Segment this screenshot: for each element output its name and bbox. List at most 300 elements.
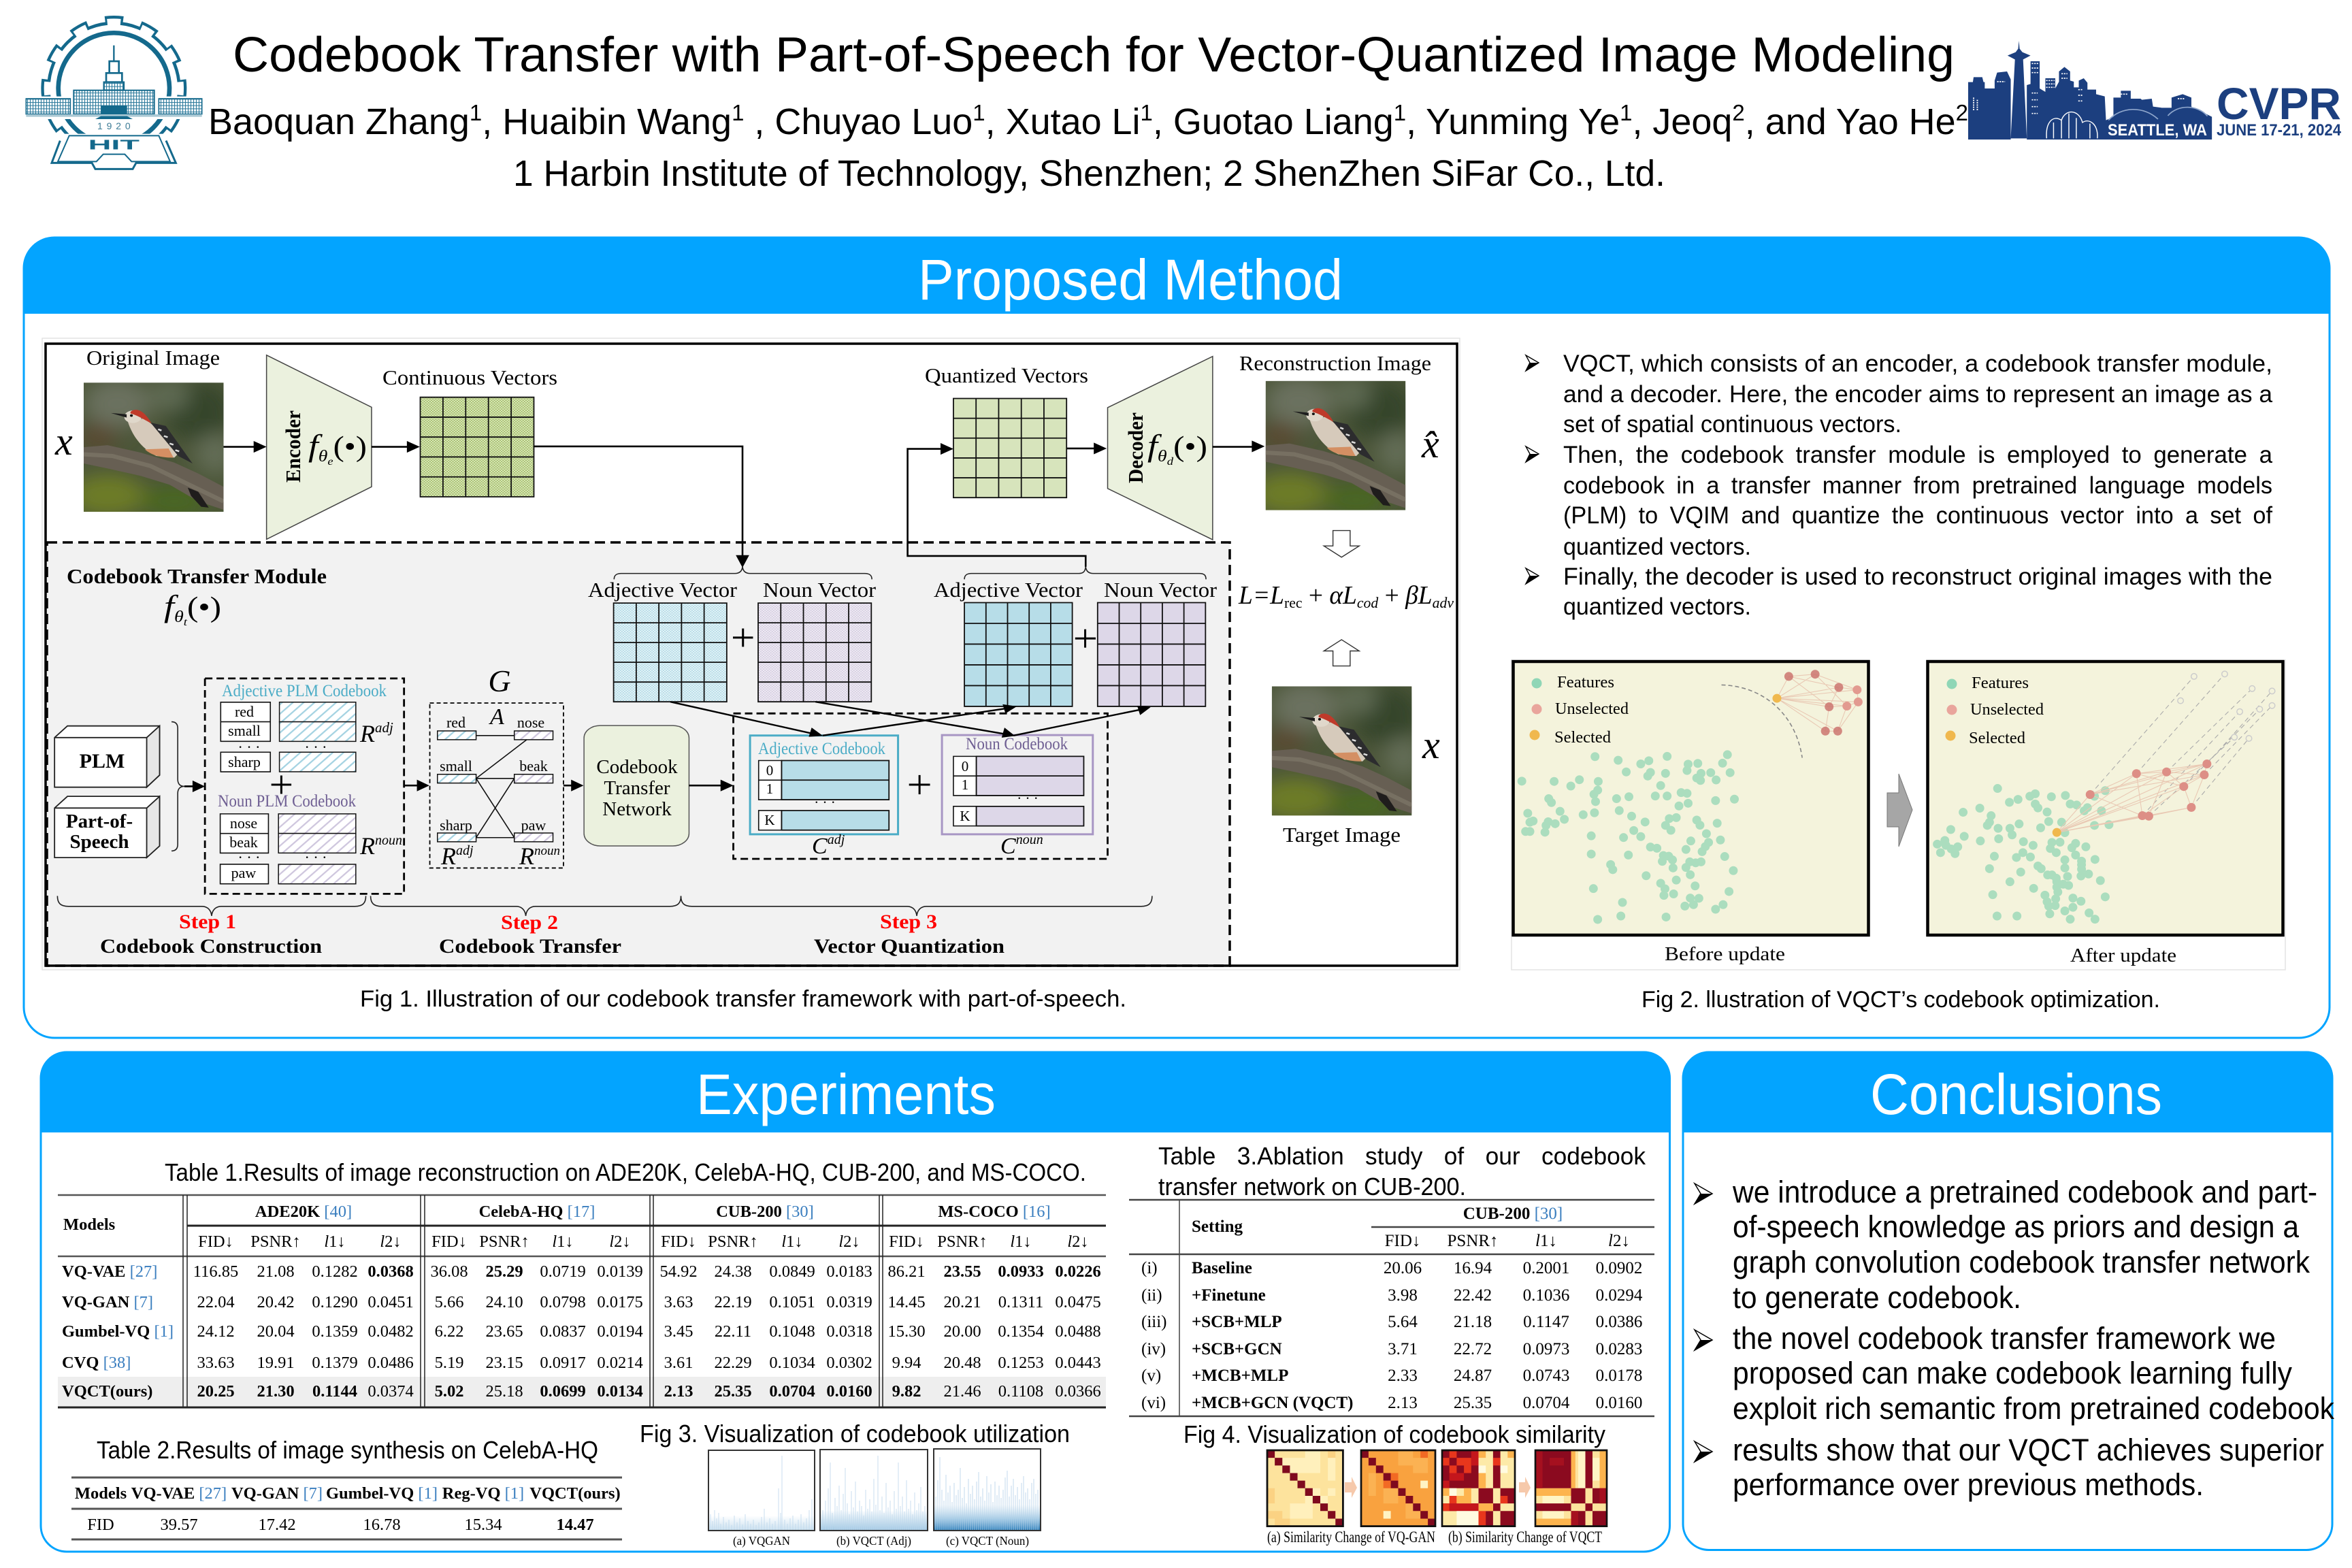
icon: target bird image — [1258, 682, 1422, 821]
formula: loss: + — [1378, 581, 1405, 610]
row SCB MLP: 0.0386 — [1596, 1313, 1642, 1331]
row VQ-GAN: 0.1290 — [312, 1293, 358, 1311]
row VQ-GAN: 0.0175 — [597, 1293, 643, 1311]
formula: transfer function: (•) — [187, 592, 221, 623]
bullet 3 — [1695, 1441, 1712, 1462]
table 2 row: 15.34 — [464, 1516, 502, 1534]
authors: , Huaibin Wang — [482, 101, 732, 142]
chart: VQCT adj — [820, 1450, 928, 1531]
row VQCT — [62, 1382, 1101, 1401]
caption: fig 1: Fig 1. Illustration of our codebook transfer framework with part-of-speech. — [360, 986, 1126, 1012]
table 2 row: 16.78 — [363, 1516, 401, 1534]
row CVQ: 0.0443 — [1055, 1354, 1101, 1372]
labels: codebook indexes: · · · — [814, 794, 836, 811]
caption: table 1: Table 1.Results of image reconstruction on ADE20K, CelebA-HQ, CUB-200, and MS-COCO. — [165, 1158, 1086, 1186]
metric headers: FID↓ — [198, 1232, 233, 1251]
text block: conclusions: results show that our VQCT achieves superior — [1733, 1433, 2324, 1467]
arrow: continuous vectors to part-of-speech split — [534, 446, 872, 579]
labels: codebook indexes: 1 — [766, 781, 773, 797]
row SCB MLP: (iii) — [1141, 1313, 1166, 1331]
symbol: x: x — [54, 419, 73, 463]
table 3 header: CUB-200 [30] — [1463, 1205, 1563, 1223]
row VQ-GAN: 22.19 — [714, 1293, 752, 1311]
row finetune: +Finetune — [1192, 1286, 1266, 1305]
row VQ-VAE: VQ-VAE [27] — [62, 1262, 157, 1281]
dataset headers: CelebA-HQ [17] — [479, 1203, 595, 1221]
metric headers: FID↓ — [431, 1232, 467, 1251]
metric headers: l2↓ — [380, 1232, 402, 1251]
formula: transfer function: t — [184, 617, 188, 628]
metric headers: Models — [63, 1215, 115, 1234]
text block: method description: Then, the codebook transfer module is employed to generate a — [1563, 442, 2273, 468]
table 2 row — [87, 1516, 594, 1534]
authors: 1 — [732, 100, 744, 125]
heatmap 1 — [1267, 1450, 1343, 1526]
row Gumbel-VQ: 20.00 — [943, 1322, 981, 1341]
figure frame — [42, 338, 1460, 970]
symbol: A: A — [489, 704, 504, 730]
label: original image: Original Image — [86, 346, 220, 370]
row CVQ: 0.1379 — [312, 1354, 358, 1372]
table 2 row: FID — [87, 1516, 114, 1534]
caption: fig 3: Fig 3. Visualization of codebook utilization — [640, 1420, 1070, 1448]
step 2 label: Codebook Transfer — [439, 935, 621, 958]
plot: before update — [1514, 662, 1869, 935]
row CVQ: 33.63 — [197, 1354, 235, 1372]
labels: noun words: · · · — [305, 849, 327, 866]
table 2 header: Gumbel-VQ [1] — [326, 1484, 438, 1503]
logo: Harbin Institute of Technology crest — [22, 20, 204, 172]
row VQCT: 0.1144 — [312, 1382, 357, 1401]
row VQ-GAN: 24.10 — [485, 1293, 523, 1311]
labels: codebook indexes: K — [960, 808, 970, 824]
box: graph G — [430, 664, 564, 870]
chart labels: (a) VQGAN — [733, 1534, 790, 1548]
authors: , Jeoq — [1632, 101, 1732, 142]
metric headers: PSNR↑ — [250, 1232, 301, 1251]
row finetune: (ii) — [1141, 1286, 1162, 1305]
row VQCT: 20.25 — [197, 1382, 235, 1401]
step 1 label — [100, 911, 322, 958]
panel header band — [24, 238, 2330, 314]
panel: experiments — [41, 1052, 1670, 1552]
row baseline: 0.2001 — [1523, 1259, 1569, 1277]
panel header band — [1683, 1052, 2332, 1132]
text block: conclusions: graph convolution codebook transfer network — [1733, 1245, 2310, 1279]
row finetune: 0.0294 — [1596, 1286, 1643, 1305]
row MCB MLP: 0.0178 — [1596, 1367, 1642, 1385]
labels: codebook indexes: · · · — [1017, 790, 1039, 806]
legend after: Features — [1972, 674, 2029, 692]
row baseline: 0.0902 — [1596, 1259, 1642, 1277]
table 2 row: 14.47 — [556, 1516, 594, 1534]
caption: table 3: transfer network on CUB-200. — [1158, 1173, 1466, 1200]
authors: , Xutao Li — [985, 101, 1141, 142]
label: R adj: R — [359, 720, 375, 747]
label: R noun: R — [359, 832, 375, 860]
figure 2: codebook optimization — [1512, 659, 2285, 970]
dataset headers — [255, 1203, 1051, 1221]
formula: encoder function: e — [327, 456, 333, 468]
labels: adjective words: small — [228, 722, 261, 739]
step 3 label: Step 3 — [880, 911, 937, 933]
block: codebook transfer network — [584, 725, 689, 846]
arrow: network to codebooks — [689, 780, 734, 791]
row CVQ: 0.1253 — [998, 1354, 1044, 1372]
bullet 3 — [1526, 568, 1539, 584]
row CVQ: 0.1034 — [769, 1354, 815, 1372]
icon: reconstructed bird image — [1252, 377, 1416, 517]
scatter before — [1522, 755, 1735, 919]
grid: adjective quantized — [964, 602, 1096, 706]
bullet 2 — [1526, 446, 1539, 462]
labels: C adj and C noun: adj — [828, 832, 845, 847]
legend before: Selected — [1554, 729, 1611, 747]
row baseline: 20.06 — [1384, 1259, 1422, 1277]
row VQCT: 0.1108 — [998, 1382, 1043, 1401]
row SCB MLP: 0.1147 — [1523, 1313, 1569, 1331]
row VQ-VAE: 0.0849 — [769, 1262, 815, 1281]
step 2 label — [439, 911, 621, 958]
table 2 header: VQCT(ours) — [529, 1484, 621, 1503]
row MCB MLP: (v) — [1141, 1367, 1161, 1385]
row CVQ — [62, 1354, 1101, 1372]
logo: Harbin Institute of Technology crest: HIT — [88, 137, 140, 152]
row Gumbel-VQ: 20.04 — [257, 1322, 295, 1341]
label: noun plm codebook: Noun PLM Codebook — [218, 792, 356, 811]
legend after: Unselected — [1970, 701, 2044, 719]
block: part of speech: Speech — [69, 831, 129, 853]
row VQ-VAE: 36.08 — [430, 1262, 468, 1281]
row finetune: 3.98 — [1388, 1286, 1418, 1305]
row VQ-VAE: 23.55 — [943, 1262, 981, 1281]
row VQ-VAE: 116.85 — [193, 1262, 238, 1281]
panel frame — [1683, 1052, 2332, 1550]
metric headers: l2↓ — [838, 1232, 860, 1251]
row Gumbel-VQ: Gumbel-VQ [1] — [62, 1322, 174, 1341]
table 3 header: l2↓ — [1608, 1232, 1630, 1250]
row baseline — [1141, 1259, 1642, 1277]
labels: noun words: beak — [229, 834, 258, 851]
row VQ-VAE: 0.0933 — [998, 1262, 1044, 1281]
row VQ-GAN: 0.1051 — [769, 1293, 815, 1311]
formula: loss: L=L — [1239, 581, 1285, 610]
row VQCT: 25.18 — [485, 1382, 523, 1401]
labels: R adj and R noun: adj — [456, 843, 474, 858]
row Gumbel-VQ: 23.65 — [485, 1322, 523, 1341]
label: adjective vector: Adjective Vector — [588, 578, 738, 602]
block: PLM: PLM — [80, 750, 125, 772]
block: codebook transfer network: Transfer — [604, 777, 670, 799]
row SCB MLP: +SCB+MLP — [1192, 1313, 1282, 1331]
grid: quantized vectors — [953, 399, 1066, 497]
text block: conclusions — [1695, 1175, 2334, 1502]
network after — [2057, 764, 2207, 832]
row VQ-GAN: 0.1311 — [998, 1293, 1043, 1311]
metric headers: FID↓ — [661, 1232, 696, 1251]
logo: CVPR 2024 Seattle — [1968, 41, 2342, 140]
formula: decoder function: (•) — [1173, 431, 1207, 463]
bullet 1 — [1526, 355, 1539, 371]
formula: loss: adv — [1433, 594, 1454, 611]
arrows: decoder — [1066, 440, 1264, 455]
block: part of speech — [54, 796, 159, 858]
grid: noun vector — [758, 603, 871, 702]
row VQ-VAE: 24.38 — [714, 1262, 752, 1281]
label: noun vector quantized: Noun Vector — [1104, 578, 1218, 602]
row SCB MLP: 21.18 — [1454, 1313, 1492, 1331]
formula: loss: cod — [1357, 594, 1379, 611]
text block: method description: Finally, the decoder is used to reconstruct original images with the — [1563, 564, 2272, 590]
text block: conclusions: of-speech knowledge as priors and design a — [1733, 1209, 2300, 1244]
row MCB MLP: 2.33 — [1388, 1367, 1418, 1385]
labels: C adj and C noun: noun — [1016, 832, 1043, 847]
row Gumbel-VQ: 3.45 — [664, 1322, 693, 1341]
labels: noun words: nose — [230, 815, 257, 832]
labels: graph nodes — [440, 714, 548, 834]
plot: after update — [1927, 662, 2283, 935]
formula: loss: rec — [1284, 594, 1303, 611]
text block: method description: VQCT, which consists of an encoder, a codebook transfer module, — [1563, 350, 2272, 377]
metric headers: l1↓ — [781, 1232, 803, 1251]
label: quantized vectors: Quantized Vectors — [925, 363, 1088, 387]
authors: 1 — [973, 100, 985, 125]
box: adjective and noun codebooks — [734, 713, 1108, 859]
title: Codebook Transfer with Part-of-Speech for Vector-Quantized Image Modeling — [233, 28, 1955, 82]
table 2 row: 39.57 — [160, 1516, 198, 1534]
labels: R adj and R noun: noun — [534, 844, 560, 858]
row baseline: Baseline — [1192, 1259, 1252, 1277]
text block: conclusions: exploit rich semantic from pretrained codebook — [1733, 1391, 2334, 1426]
metric headers: l2↓ — [1067, 1232, 1089, 1251]
formula: loss: + — [1302, 581, 1329, 610]
heading: conclusions: Conclusions — [1870, 1062, 2162, 1126]
authors: Baoquan Zhang — [208, 101, 470, 142]
row VQ-GAN: 0.0798 — [540, 1293, 586, 1311]
text block: method description: set of spatial continuous vectors. — [1563, 411, 1901, 438]
brace and arrow: inputs to codebook construction — [172, 722, 205, 851]
row VQ-VAE: 0.0183 — [826, 1262, 872, 1281]
chart: VQCT noun — [934, 1449, 1041, 1531]
grid: noun quantized — [1098, 602, 1205, 706]
labels: codebook indexes: 1 — [962, 777, 968, 793]
arrow: before to after — [1887, 774, 1912, 847]
panel frame — [41, 1052, 1670, 1552]
text block: method description: and a decoder. Here, the encoder aims to represent an image as a — [1563, 381, 2273, 408]
table 2 header — [75, 1484, 621, 1503]
heading: experiments: Experiments — [696, 1062, 996, 1126]
row CVQ: 9.94 — [892, 1354, 921, 1372]
row MCB GCN: 0.0160 — [1596, 1394, 1642, 1412]
authors: , Guotao Liang — [1153, 101, 1394, 142]
metric headers: l2↓ — [609, 1232, 631, 1251]
text block: method description: codebook in a transfer manner from pretrained language models — [1563, 472, 2272, 499]
text block: method description: quantized vectors. — [1563, 534, 1751, 560]
step 3 label — [814, 911, 1004, 958]
caption: table 2: Table 2.Results of image synthesis on CelebA-HQ — [97, 1436, 598, 1464]
row VQ-GAN: 22.04 — [197, 1293, 235, 1311]
heatmap 3 — [1442, 1450, 1515, 1526]
row VQ-VAE: 86.21 — [887, 1262, 926, 1281]
heading: codebook transfer module: Codebook Transfer Module — [67, 564, 327, 588]
row VQ-GAN: 0.0475 — [1055, 1293, 1101, 1311]
block: codebook transfer network: Codebook — [596, 756, 678, 778]
authors: 1 — [1394, 100, 1406, 125]
arrows: encoder — [223, 441, 420, 453]
row Gumbel-VQ: 0.1354 — [998, 1322, 1044, 1341]
labels: R adj and R noun: R — [440, 843, 456, 870]
caption: fig 4: Fig 4. Visualization of codebook similarity — [1183, 1420, 1605, 1448]
row Gumbel-VQ — [62, 1322, 1101, 1341]
legend before — [1530, 674, 1629, 747]
row SCB MLP — [1141, 1313, 1642, 1331]
chart labels — [733, 1534, 1029, 1548]
legend after — [1945, 674, 2044, 747]
table 2 header: VQ-VAE [27] — [131, 1484, 227, 1503]
caption: fig 2: Fig 2. llustration of VQCT’s codebook optimization. — [1642, 987, 2160, 1013]
arrow: heatmap 1 to 2 — [1345, 1477, 1357, 1498]
arrows: vectors through codebooks — [670, 702, 1151, 738]
row VQ-GAN — [62, 1293, 1101, 1311]
row VQ-VAE: 0.0368 — [368, 1262, 414, 1281]
row finetune: 22.42 — [1454, 1286, 1492, 1305]
codebook transfer module background — [47, 542, 1230, 966]
row VQCT: 21.46 — [943, 1382, 981, 1401]
row CVQ: 5.19 — [435, 1354, 463, 1372]
authors: 2 — [1732, 100, 1745, 125]
chart labels: (c) VQCT (Noun) — [946, 1534, 1029, 1548]
row VQ-GAN: 3.63 — [664, 1293, 693, 1311]
row MCB MLP: 0.0743 — [1523, 1367, 1569, 1385]
formula: encoder function: (•) — [333, 431, 367, 463]
row Gumbel-VQ: 6.22 — [435, 1322, 463, 1341]
row VQCT: 0.0704 — [769, 1382, 815, 1401]
row CVQ: 3.61 — [664, 1354, 693, 1372]
table 3 header: l1↓ — [1535, 1232, 1557, 1250]
row baseline: (i) — [1141, 1259, 1158, 1277]
panel header band — [41, 1052, 1670, 1132]
label: before update: Before update — [1665, 943, 1785, 965]
authors: 1 — [470, 100, 482, 125]
formula: decoder function: f — [1147, 428, 1162, 463]
labels: graph nodes: nose — [517, 714, 544, 731]
icon: original bird image — [69, 378, 234, 518]
row VQ-VAE — [62, 1262, 1101, 1281]
row VQCT: 0.0134 — [597, 1382, 643, 1401]
dataset headers: ADE20K [40] — [255, 1203, 352, 1221]
arrow: graph to network — [564, 780, 583, 791]
authors: , Yunming Ye — [1406, 101, 1620, 142]
arrow: construction to graph — [404, 780, 429, 791]
label: noun vector: Noun Vector — [763, 578, 877, 602]
row SCB GCN: 0.0973 — [1523, 1340, 1569, 1358]
formula: decoder function: d — [1167, 456, 1174, 468]
row VQ-GAN: 20.21 — [943, 1293, 981, 1311]
row VQCT: 0.0699 — [540, 1382, 586, 1401]
row VQ-VAE: 21.08 — [257, 1262, 295, 1281]
table 3 — [1129, 1200, 1654, 1416]
labels: noun words: paw — [231, 864, 256, 881]
metric headers: PSNR↑ — [708, 1232, 758, 1251]
row MCB GCN: (vi) — [1141, 1394, 1166, 1412]
step 1 label: Codebook Construction — [100, 935, 322, 958]
row VQ-GAN: 20.42 — [257, 1293, 295, 1311]
row SCB GCN: 22.72 — [1454, 1340, 1492, 1358]
row CVQ: CVQ [38] — [62, 1354, 131, 1372]
heatmap caption a: (a) Similarity Change of VQ-GAN — [1267, 1529, 1435, 1546]
brace: step 2 — [371, 896, 681, 916]
panel: proposed method — [24, 238, 2330, 1038]
labels: noun words: · · · — [238, 849, 260, 866]
row finetune: 0.1036 — [1523, 1286, 1569, 1305]
label: adjective vector quantized: Adjective Vector — [934, 578, 1083, 602]
step 2 label: Step 2 — [501, 911, 558, 934]
labels: R adj and R noun: R — [519, 843, 534, 870]
dataset headers: CUB-200 [30] — [716, 1203, 814, 1221]
row VQCT: 0.0160 — [826, 1382, 872, 1401]
row SCB GCN: +SCB+GCN — [1192, 1340, 1282, 1358]
legend before: Unselected — [1555, 700, 1629, 718]
label: R noun: noun — [375, 833, 402, 848]
table 2 header: Reg-VQ [1] — [442, 1484, 524, 1503]
labels: R adj and R noun — [440, 843, 560, 870]
labels: adjective words: sharp — [228, 753, 261, 770]
table 2 header: VQ-GAN [7] — [231, 1484, 323, 1503]
table 2 header: Models — [75, 1484, 127, 1503]
legend after: Selected — [1969, 730, 2025, 747]
chart: VQGAN — [708, 1450, 815, 1531]
labels: codebook indexes: 0 — [962, 758, 968, 774]
row Gumbel-VQ: 0.0488 — [1055, 1322, 1101, 1341]
row SCB GCN — [1141, 1340, 1642, 1358]
bullet 1 — [1695, 1183, 1712, 1204]
dataset headers: MS-COCO [16] — [938, 1203, 1051, 1221]
metric headers — [63, 1215, 1089, 1251]
heatmap caption b: (b) Similarity Change of VQCT — [1448, 1529, 1602, 1546]
labels: adjective words: · · · — [305, 738, 327, 755]
label: continuous vectors: Continuous Vectors — [382, 365, 557, 389]
row VQ-VAE: 54.92 — [659, 1262, 698, 1281]
row VQCT: VQCT(ours) — [62, 1382, 152, 1401]
labels: C adj and C noun — [812, 832, 1043, 859]
metric headers: PSNR↑ — [479, 1232, 529, 1251]
metric headers: l1↓ — [552, 1232, 574, 1251]
row VQCT: 25.35 — [714, 1382, 752, 1401]
brace: step 1 — [57, 896, 366, 916]
legend before: Features — [1557, 674, 1614, 691]
caption: table 3: Table 3.Ablation study of our codebook — [1158, 1142, 1646, 1170]
table 3 header: FID↓ — [1385, 1232, 1420, 1250]
table 1 — [58, 1195, 1106, 1407]
symbol: x target: x — [1422, 723, 1440, 767]
text block: conclusions: performance over previous methods. — [1733, 1467, 2204, 1502]
labels: graph nodes: small — [440, 757, 472, 774]
cvpr wordmark: CVPR — [2217, 78, 2341, 129]
row Gumbel-VQ: 0.0318 — [826, 1322, 872, 1341]
panel: conclusions — [1683, 1052, 2334, 1550]
row VQ-GAN: VQ-GAN [7] — [62, 1293, 153, 1311]
heading: proposed method: Proposed Method — [918, 248, 1343, 312]
encoder trapezoid — [267, 355, 372, 539]
row VQ-VAE: 0.0719 — [540, 1262, 586, 1281]
labels: graph nodes: red — [446, 714, 466, 731]
row CVQ: 0.0486 — [368, 1354, 414, 1372]
block: PLM — [54, 726, 159, 787]
figure outline — [1512, 659, 2285, 970]
row SCB GCN: 0.0283 — [1596, 1340, 1642, 1358]
label: R adj: adj — [375, 719, 393, 736]
row MCB GCN: 0.0704 — [1523, 1394, 1570, 1412]
